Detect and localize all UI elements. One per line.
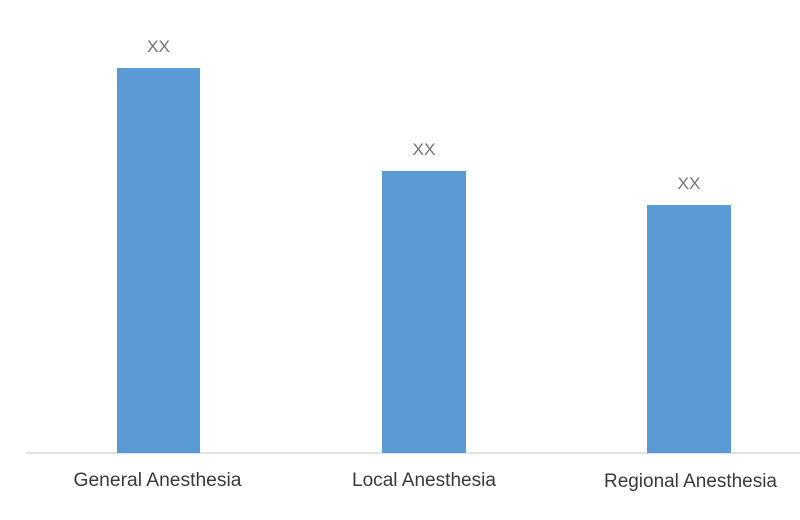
value label: General Anesthesia: XX [147, 37, 170, 56]
bar: General Anesthesia [74, 37, 242, 491]
category label: Local Anesthesia: Local Anesthesia [352, 470, 496, 491]
value label: Local Anesthesia: XX [412, 140, 436, 159]
value label: Regional Anesthesia: XX [678, 174, 700, 193]
bar: Regional Anesthesia [604, 174, 777, 492]
category label: Regional Anesthesia: Regional Anesthesia [604, 471, 777, 492]
bar: Local Anesthesia [352, 140, 496, 491]
category label: General Anesthesia: General Anesthesia [74, 470, 242, 491]
